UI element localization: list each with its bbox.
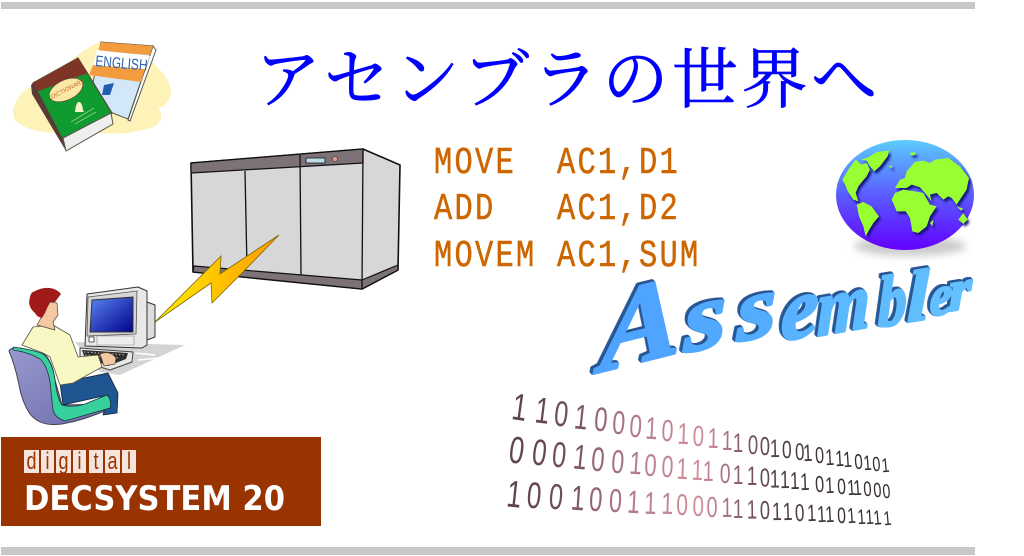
binary row 3: 1 bbox=[722, 493, 732, 524]
icon: globe bbox=[836, 140, 974, 256]
binary row 3: 0 bbox=[525, 474, 543, 517]
binary row 3: 1 bbox=[883, 506, 892, 530]
binary row 2: 1 bbox=[628, 445, 643, 481]
binary row 3: 1 bbox=[816, 502, 827, 528]
binary row 3: 1 bbox=[807, 501, 817, 527]
binary row 2: 0 bbox=[610, 444, 625, 482]
binary row 1: 1 bbox=[863, 451, 872, 475]
binary row 3: 1 bbox=[846, 503, 857, 528]
binary row 2: 1 bbox=[825, 473, 835, 499]
code block: assembly listing: MOVE AC1,D1 bbox=[434, 142, 680, 185]
binary row 3: 1 bbox=[782, 498, 793, 526]
binary row 1: 1 bbox=[572, 398, 590, 438]
binary row 2: 0 bbox=[837, 475, 847, 500]
binary row 3: 1 bbox=[825, 502, 835, 528]
binary row 1: 1 bbox=[533, 389, 552, 432]
binary row 3: 1 bbox=[505, 472, 524, 516]
binary row 3: 1 bbox=[644, 485, 657, 521]
icon: person at computer bbox=[9, 287, 185, 425]
binary row 3: 1 bbox=[872, 506, 882, 529]
code block: assembly listing: ADD AC1,D2 bbox=[434, 188, 680, 231]
digital logo: d bbox=[26, 449, 37, 475]
binary row 1: 0 bbox=[552, 393, 570, 435]
binary row 1: 1 bbox=[881, 453, 890, 477]
binary row 2: 1 bbox=[691, 454, 704, 487]
binary row 2: 1 bbox=[852, 475, 862, 500]
binary row 1: 0 bbox=[593, 402, 609, 440]
binary row 1: 0 bbox=[628, 408, 643, 444]
title: アセンブラの世界へ bbox=[255, 44, 881, 117]
binary row 1: 0 bbox=[795, 439, 805, 466]
digital logo: g bbox=[59, 449, 69, 475]
binary row 1: 1 bbox=[842, 448, 853, 473]
binary row 2: 1 bbox=[571, 438, 589, 478]
binary row 1: 1 bbox=[707, 424, 719, 455]
binary row 1: 1 bbox=[770, 434, 780, 463]
binary row 1: 1 bbox=[803, 440, 813, 467]
binary row 1: 0 bbox=[692, 420, 705, 453]
binary row 1: 1 bbox=[510, 385, 530, 429]
3D word: Assembler: A bbox=[593, 249, 681, 399]
binary row 1: 0 bbox=[814, 443, 825, 469]
digital logo: a bbox=[107, 449, 118, 475]
binary row 2: 0 bbox=[863, 477, 872, 501]
code block: assembly listing bbox=[434, 142, 701, 278]
binary row 2: 0 bbox=[550, 434, 568, 476]
binary row 2: 0 bbox=[530, 431, 549, 474]
binary row 1: 0 bbox=[661, 413, 674, 448]
digital logo: i bbox=[77, 449, 82, 475]
3D word: Assembler: b bbox=[878, 260, 907, 343]
binary row 3: 0 bbox=[795, 500, 805, 527]
binary row 3: 1 bbox=[746, 494, 757, 524]
code block: assembly listing: MOVEM AC1,SUM bbox=[434, 235, 701, 278]
binary row 1: 1 bbox=[721, 426, 733, 457]
binary row 1: 1 bbox=[677, 418, 690, 451]
binary row 3 bbox=[505, 472, 892, 530]
binary row 1: 0 bbox=[611, 405, 626, 443]
digital logo: i bbox=[45, 449, 49, 475]
digital logo: l bbox=[127, 449, 131, 475]
digital logo: t bbox=[93, 449, 99, 475]
binary row 3: 1 bbox=[626, 484, 641, 520]
book title: ENGLISH: ENGLISH bbox=[95, 53, 148, 74]
binary row 3: 1 bbox=[772, 497, 782, 526]
system name: DECSYSTEM 20 bbox=[24, 479, 285, 519]
binary row 3: 0 bbox=[676, 489, 688, 522]
binary row 3: 1 bbox=[661, 486, 674, 521]
binary row 2: 1 bbox=[676, 453, 689, 486]
binary row 1: 0 bbox=[760, 432, 770, 461]
binary row 1: 0 bbox=[782, 436, 792, 464]
binary row 2: 0 bbox=[661, 449, 674, 484]
binary row 1: 0 bbox=[748, 430, 758, 460]
binary row 1: 1 bbox=[825, 445, 835, 471]
binary row 3: 0 bbox=[608, 483, 623, 520]
binary row 2 bbox=[507, 428, 891, 503]
3D word: Assembler bbox=[593, 249, 973, 399]
binary row 2: 0 bbox=[882, 479, 891, 503]
binary row 2: 1 bbox=[747, 461, 757, 491]
binary row 3: 0 bbox=[706, 493, 718, 524]
binary row 2: 1 bbox=[770, 464, 780, 493]
panel: DECSYSTEM 20 banner bbox=[1, 437, 321, 526]
binary row 2: 0 bbox=[719, 459, 731, 490]
3D word: Assembler: m bbox=[817, 256, 870, 354]
3D word: Assembler: e bbox=[781, 257, 819, 361]
binary row 1 bbox=[510, 385, 890, 477]
binary row 2: 0 bbox=[760, 463, 770, 492]
binary row 2: 0 bbox=[590, 440, 606, 480]
binary row 3: 0 bbox=[588, 480, 604, 520]
binary row 2: 0 bbox=[644, 447, 658, 483]
binary row 2: 1 bbox=[846, 475, 857, 500]
digital logo bbox=[24, 449, 136, 475]
3D word: Assembler: l bbox=[907, 255, 930, 338]
binary row 3: 0 bbox=[692, 490, 704, 523]
binary row 1: 0 bbox=[871, 452, 882, 476]
3D word: Assembler: s bbox=[736, 254, 776, 361]
binary row 3: 1 bbox=[733, 494, 743, 524]
binary row 2: 0 bbox=[507, 428, 527, 472]
binary row 1: 0 bbox=[853, 449, 863, 474]
book title: DICTIONARY: DICTIONARY bbox=[50, 79, 86, 101]
binary row 2: 0 bbox=[872, 478, 883, 502]
binary row 2: 1 bbox=[800, 469, 810, 496]
binary row 3: 1 bbox=[570, 479, 586, 519]
binary row 2: 1 bbox=[733, 460, 743, 490]
binary row 3: 1 bbox=[857, 504, 866, 529]
binary row 1: 1 bbox=[835, 447, 845, 472]
3D word: Assembler: e bbox=[930, 262, 952, 329]
binary row 2: 1 bbox=[790, 468, 800, 495]
binary digits bbox=[505, 385, 892, 530]
binary row 1: 1 bbox=[733, 428, 743, 458]
bottom rule bbox=[1, 547, 975, 555]
binary row 1: 1 bbox=[645, 410, 659, 446]
icon: mainframe server bbox=[191, 149, 400, 289]
binary row 3: 0 bbox=[547, 476, 565, 518]
binary row 2: 1 bbox=[780, 466, 790, 494]
binary row 2: 0 bbox=[814, 472, 825, 498]
3D word: Assembler: s bbox=[683, 259, 727, 374]
binary row 3: 1 bbox=[865, 505, 874, 529]
binary row 2: 1 bbox=[702, 457, 714, 488]
top rule bbox=[1, 2, 975, 9]
icon: books bbox=[13, 42, 171, 151]
arrow: lightning bolt bbox=[155, 235, 279, 322]
binary row 3: 0 bbox=[760, 496, 770, 525]
3D word: Assembler: r bbox=[949, 256, 973, 324]
binary row 3: 0 bbox=[837, 504, 847, 529]
